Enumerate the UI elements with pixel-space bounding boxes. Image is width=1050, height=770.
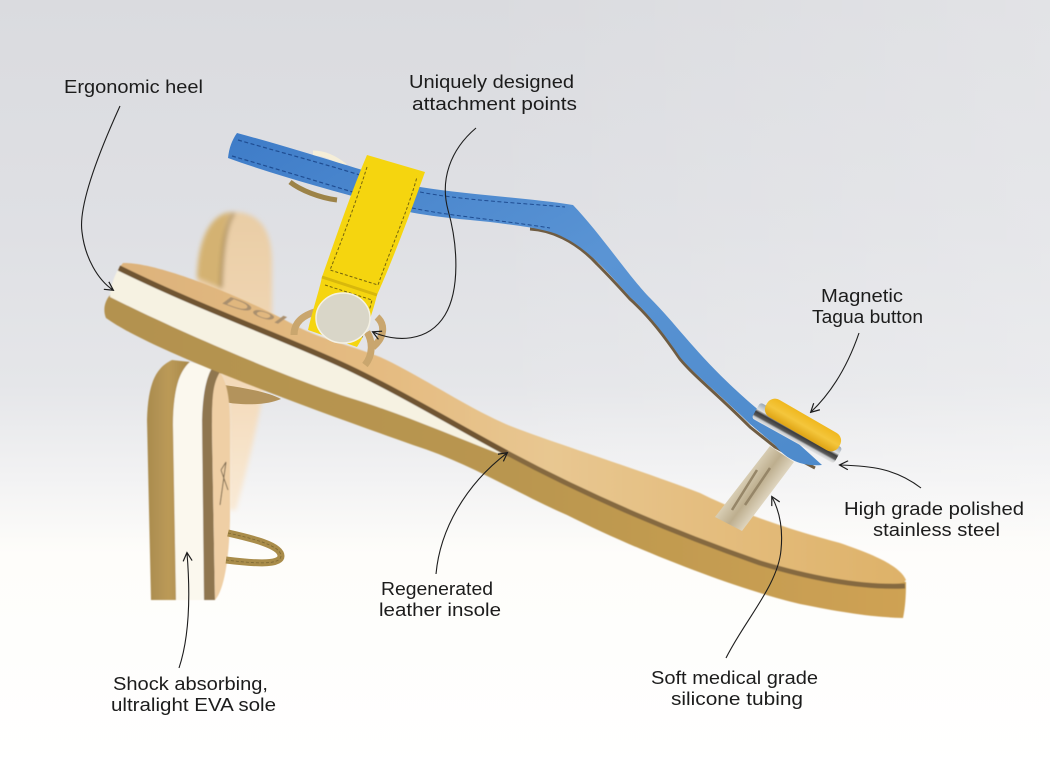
- blue T strap: [228, 133, 822, 468]
- callout: EVA sole: [111, 553, 276, 715]
- callout: Ergonomic heel: [64, 77, 203, 290]
- callout: EVA sole: Shock absorbing,: [113, 674, 268, 694]
- callout: silicone tubing: silicone tubing: [671, 689, 803, 709]
- insole edge: [212, 372, 230, 600]
- callout: Magnetic Tagua button: Magnetic: [821, 286, 903, 306]
- callout: stainless steel: High grade polished: [844, 499, 1024, 519]
- callout: Magnetic Tagua button: Tagua button: [812, 307, 923, 327]
- brown layer heel: [119, 268, 507, 453]
- callout: Ergonomic heel: Ergonomic heel: [64, 77, 203, 97]
- strap body: [228, 133, 822, 465]
- rear sandal upper loop: [224, 385, 281, 404]
- callout: silicone tubing: [651, 497, 818, 709]
- gold outsole: [104, 295, 906, 618]
- steel disc: [752, 402, 842, 464]
- logo on insole: Dol: [220, 292, 291, 330]
- rear sandal stacked sole: [147, 360, 230, 600]
- yellow top: [762, 395, 844, 455]
- brown layer: [202, 368, 222, 600]
- rear sandal lower loop: [226, 533, 281, 563]
- callout: leather insole: Regenerated: [381, 579, 493, 599]
- callout: attachment points: Uniquely designed: [409, 72, 574, 92]
- rear strap buckle behind blue strap: [290, 153, 345, 200]
- callout: EVA sole: ultralight EVA sole: [111, 695, 276, 715]
- brown layer forefoot: [507, 453, 905, 586]
- white EVA layer: [173, 362, 215, 600]
- main sandal sole: [104, 263, 906, 618]
- white EVA layer: [110, 268, 507, 453]
- tan cord loops at attachment: [294, 311, 383, 365]
- callout: stainless steel: stainless steel: [873, 520, 1000, 540]
- callout: leather insole: [379, 453, 507, 620]
- yellow attachment strap: [308, 155, 425, 347]
- callout: attachment points: attachment points: [412, 94, 577, 114]
- blurred far heel of rear sandal: [197, 212, 272, 510]
- metal button on yellow strap: [316, 293, 370, 343]
- callout: stainless steel: [840, 465, 1024, 540]
- callout: Magnetic Tagua button: [811, 286, 923, 412]
- silicone tubing peg: [715, 446, 794, 531]
- gold sole layer: [147, 360, 190, 600]
- magnetic Tagua button: [752, 395, 844, 464]
- callout: silicone tubing: Soft medical grade: [651, 668, 818, 688]
- callout: attachment points: [373, 72, 577, 338]
- insole surface: [119, 263, 906, 585]
- brown strap backing: [530, 229, 815, 468]
- callout: leather insole: leather insole: [379, 600, 501, 620]
